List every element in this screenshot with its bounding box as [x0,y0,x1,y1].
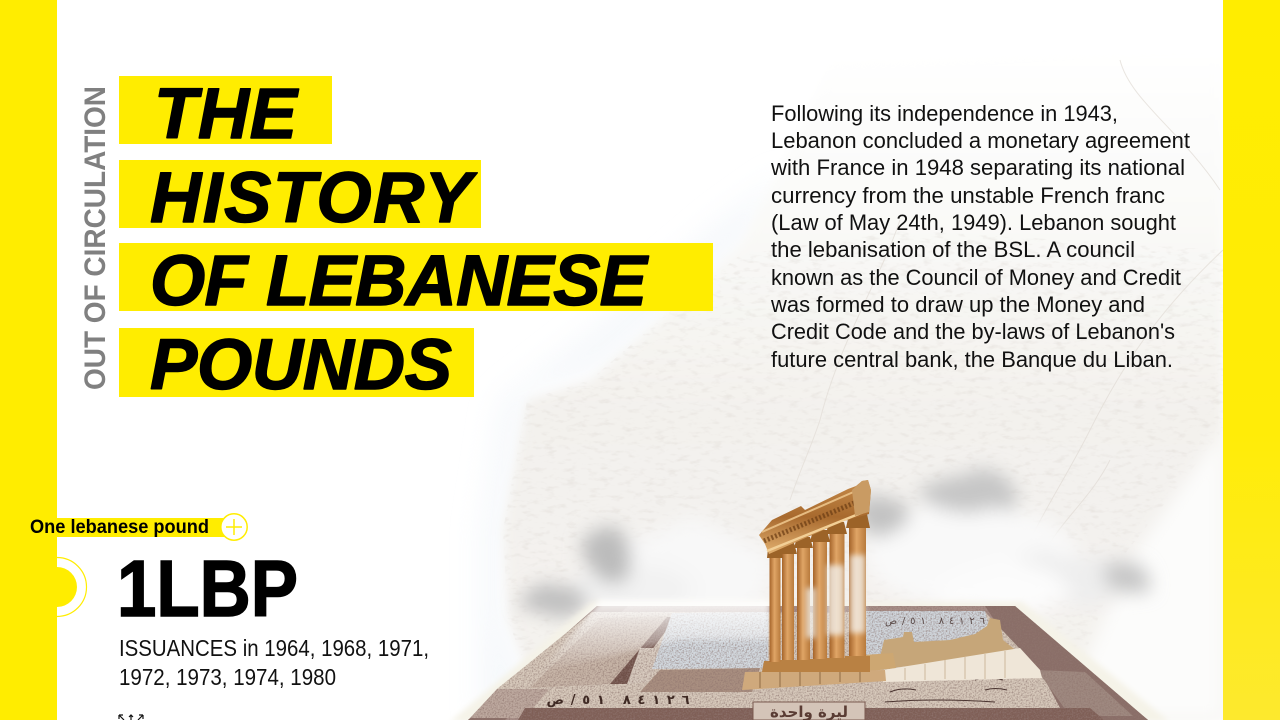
banknote label: one lebanese pound: One lebanese pound [30,517,209,538]
brown town strip [640,668,760,692]
centre value box [753,702,865,720]
corner block of entablature [852,480,871,516]
note right border [985,606,1148,720]
blue grey sky panel left [652,612,768,669]
intro paragraph: (Law of May 24th, 1949). Lebanon sought [771,210,1176,235]
bottom brown band [518,708,1104,720]
intro paragraph: Lebanon concluded a monetary agreement [771,128,1190,153]
intro paragraph: the lebanisation of the BSL. A council [771,237,1135,262]
intro paragraph: currency from the unstable French franc [771,183,1165,208]
title line: THE: THE [154,75,300,154]
map lettering texture [503,230,1223,720]
mist over columns [806,555,865,638]
intro paragraph: Credit Code and the by-laws of Lebanon's [771,319,1175,344]
column 1 [770,556,780,662]
pale valley on the right [1060,430,1223,720]
vertical label: out of circulation: OUT OF CIRCULATION [79,86,112,390]
background map of Lebanon [480,40,1223,720]
issuance years: ISSUANCES in 1964, 1968, 1971, [119,635,429,661]
right yellow side bar [1223,0,1280,720]
sea tint along coast [480,170,790,720]
marker: yellow half circle with ring [57,558,86,616]
banknote [468,600,1148,720]
smoke behind temple [521,472,1149,625]
serial number: ٨٤١٢٦ ٥١/ص [546,693,690,708]
intro paragraph: Following its independence in 1943, [771,101,1118,126]
column 2 [782,552,794,660]
pale wall [883,648,1042,682]
issuance years [119,635,429,690]
title line: THE [119,75,332,154]
title line: HISTORY: HISTORY [150,159,478,238]
left building area [530,616,668,688]
blue grey sky panel right [860,611,996,655]
intro paragraph: future central bank, the Banque du Liban. [771,347,1173,372]
note left border [468,606,628,720]
issuance years: 1972, 1973, 1974, 1980 [119,664,336,690]
fortress ruins [880,618,1018,668]
note central tan field [497,612,1060,708]
title line: POUNDS: POUNDS [150,326,452,405]
stone wall and ruins [742,618,1042,690]
right ornament [1037,670,1133,716]
land area [503,40,1223,720]
foundation stones [742,670,886,690]
temple columns [759,480,871,672]
intro paragraph: known as the Council of Money and Credit [771,265,1181,290]
column bases [762,656,870,672]
note base [468,606,1148,720]
capitals [767,514,870,558]
denomination: 1LBP: 1LBP [117,544,298,633]
signatures [885,678,1007,702]
intro paragraph [770,101,1190,372]
illustration: banknote and temple of Baalbek [450,472,1170,720]
intro paragraph: with France in 1948 separating its national [770,155,1185,180]
upper serial number: ٨٤١٢٦ ٥١/ص [885,616,985,627]
corner value box [470,689,549,718]
note printed areas [468,606,1148,720]
column 3 [797,546,810,660]
column 6 [849,525,866,656]
title [119,75,713,405]
paper sheet under note [450,602,1170,720]
icon: plus in circle [221,514,247,540]
left yellow side bar [0,0,57,720]
icon: expand arrows [119,715,143,720]
dark diagonal stripe [610,617,676,684]
small column relief [627,648,663,684]
intro paragraph: was formed to draw up the Money and [770,292,1145,317]
fog fading the note top [540,600,770,672]
column 5 [830,531,844,658]
entablature [759,480,871,554]
banknote label: one lebanese pound [30,514,247,540]
title line: OF LEBANESE: OF LEBANESE [150,242,650,321]
foundation block [863,653,896,672]
column 4 [813,539,827,659]
